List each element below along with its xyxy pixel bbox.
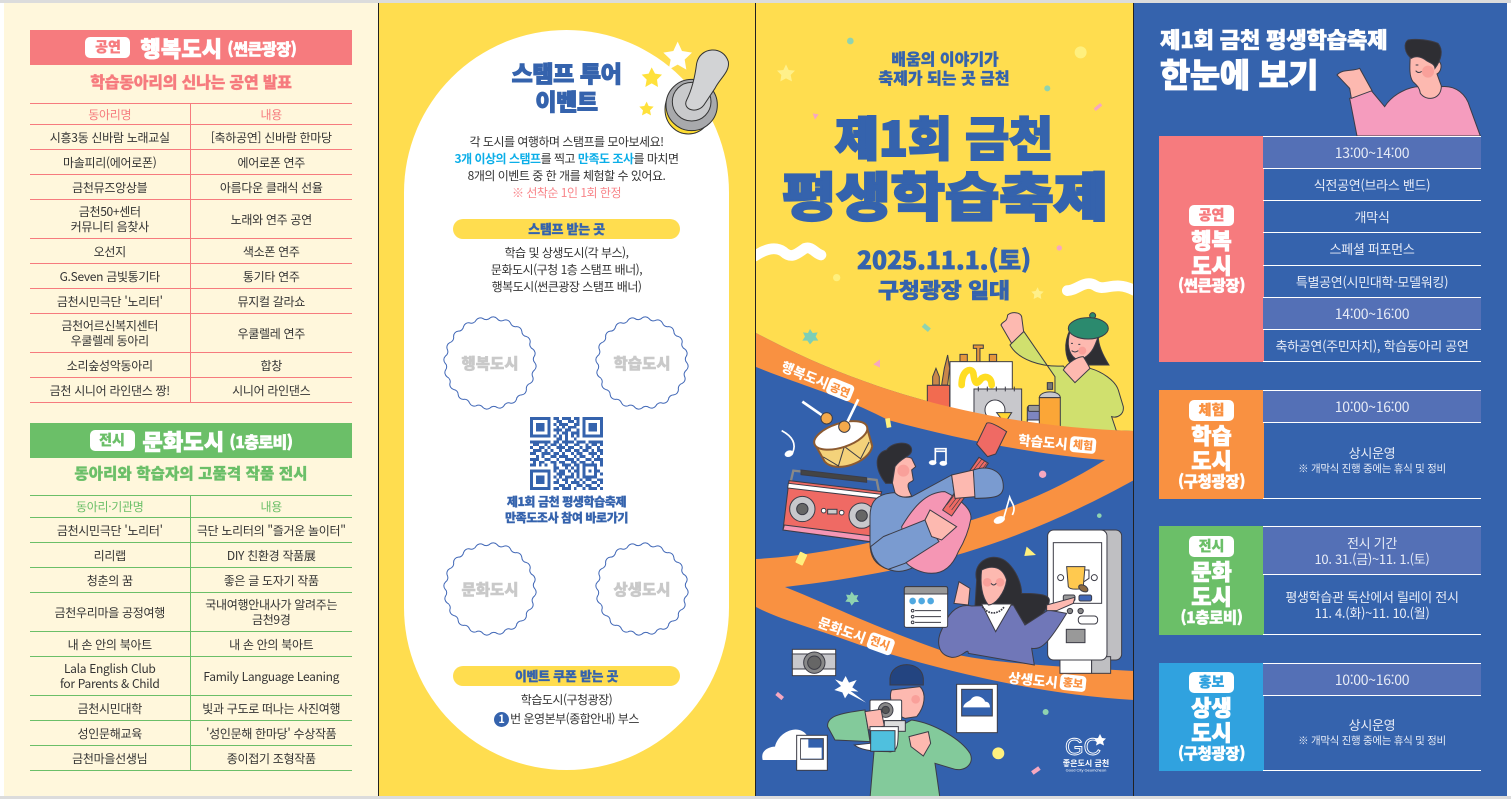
heading: 문화도시 bar: 문화도시 <box>143 424 224 456</box>
stamp: 상생도시: 상생도시 <box>613 578 671 600</box>
icon: boombox <box>783 470 882 542</box>
ribbon label: 문화도시 전시: 전시 <box>868 632 892 654</box>
row: 스페셜 퍼포먼스 <box>1263 232 1481 265</box>
text: coupon location: 1 <box>498 711 505 727</box>
icon: survey window <box>845 587 948 627</box>
icon: music notes <box>782 431 1014 525</box>
text: coupon location: 학습도시(구청광장) <box>521 691 612 708</box>
illustration: presenter <box>1336 38 1481 136</box>
time: 학습도시 10:00~16:00: 10:00~16:00 <box>1335 396 1409 416</box>
pill: 스탬프 받는 곳 <box>453 219 680 239</box>
text: coupon location <box>494 691 639 727</box>
table: 전시 동아리: 금천마을선생님 <box>72 750 147 766</box>
table: 전시 동아리 <box>30 495 352 771</box>
logo: 좋은도시 금천: Good City Geumcheon <box>1066 768 1106 772</box>
decoration: middle confetti <box>795 323 1102 566</box>
decoration: top confetti <box>755 38 1135 299</box>
row: 상시운영 상생: ※ 개막식 진행 중에는 휴식 및 정비 <box>1298 733 1446 748</box>
block: 문화도시: 도시 <box>1191 580 1232 612</box>
stamp: 학습도시 <box>596 317 688 409</box>
row: 릴레이 전시: 평생학습관 독산에서 릴레이 전시 <box>1285 586 1459 606</box>
block: 행복도시: 행복 <box>1191 224 1232 256</box>
QR code <box>530 417 603 490</box>
table: 공연 동아리: 색소폰 연주 <box>243 242 300 260</box>
heading: stamp tour <box>512 55 621 117</box>
block: 문화도시: 전시 <box>1199 536 1224 556</box>
table: 전시 동아리: 금천우리마을 공정여행 <box>55 604 165 620</box>
block: 상생도시 <box>1159 663 1264 771</box>
row: 축하공연 <box>1263 329 1481 361</box>
ribbon label: 상생도시 홍보: 홍보 <box>1062 674 1084 692</box>
logo: 좋은도시 금천: GC <box>1065 734 1101 761</box>
table: 공연 동아리: 금천시민극단 '노리터' <box>57 292 163 310</box>
table: 공연 동아리: 시흥3동 신바람 노래교실 <box>50 128 170 146</box>
ribbon label: 상생도시 홍보 <box>1007 666 1087 692</box>
row: 개막식: 개막식 <box>1354 206 1389 226</box>
table: 공연 동아리: 우쿨렐레 연주 <box>237 324 305 342</box>
subheading: 공연 발표: 학습동아리의 신나는 공연 발표 <box>90 69 292 93</box>
table: 공연 동아리: 통기타 연주 <box>243 268 300 284</box>
text: stamp locations <box>491 244 642 295</box>
illustration: photographer <box>828 665 971 798</box>
table: 공연 동아리: 커뮤니티 음찾사 <box>71 218 149 235</box>
table: 전시 동아리: 금천시민대학 <box>78 700 142 716</box>
table: 공연 동아리: 금천 시니어 라인댄스 짱! <box>50 382 170 398</box>
panel: cover poster <box>756 3 1133 796</box>
table: 전시 동아리: 국내여행안내사가 알려주는 <box>205 596 337 613</box>
illustration: kiosk <box>1048 530 1122 673</box>
table: 공연 동아리: 내용 <box>260 106 282 122</box>
heading: 문화도시 bar: (1층로비) <box>229 428 292 452</box>
row: 상시운영 상생 <box>1263 695 1481 771</box>
table: 공연 동아리: 우쿨렐레 동아리 <box>71 332 149 349</box>
table: 전시 동아리: 금천9경 <box>252 611 291 628</box>
stamp: 행복도시: 행복도시 <box>461 352 519 374</box>
row: 상시운영: 상시운영 <box>1349 442 1395 462</box>
table: 전시 동아리: 동아리·기관명 <box>76 498 144 515</box>
time: 14:00~16:00: 14:00~16:00 <box>1335 304 1409 324</box>
logo: 좋은도시 금천 <box>1063 734 1109 772</box>
panel: programme tables <box>4 3 379 796</box>
block: 상생도시: 홍보 <box>1199 672 1224 692</box>
block: 상생도시: 도시 <box>1191 716 1232 748</box>
row: 식전공연 <box>1263 168 1481 200</box>
block: 학습도시: 체험 <box>1199 400 1224 420</box>
text: stamp locations: 학습 및 상생도시(각 부스), <box>505 244 628 261</box>
table: 전시 동아리: Family Language Leaning <box>203 668 339 684</box>
time: 14:00~16:00 <box>1263 297 1481 329</box>
ribbon label: 학습도시 체험: 학습도시 <box>1017 429 1069 453</box>
title: schedule line 2: 한눈에 보기 <box>1160 49 1318 97</box>
row: 스페셜 퍼포먼스: 스페셜 퍼포먼스 <box>1330 239 1414 258</box>
row: 릴레이 전시: 11. 4.(화)~11. 10.(월) <box>1314 602 1430 622</box>
row: 식전공연: 식전공연(브라스 밴드) <box>1314 174 1430 194</box>
table: 전시 동아리: '성인문해 한마당' 수상작품 <box>206 724 336 742</box>
block: 행복도시: (썬큰광장) <box>1178 274 1245 296</box>
text: slogan: 배움의 이야기가 <box>891 46 999 70</box>
row: 상시운영: ※ 개막식 진행 중에는 휴식 및 정비 <box>1298 460 1446 476</box>
block: 학습도시 <box>1159 390 1264 499</box>
row: 특별공연 <box>1263 265 1481 297</box>
table: 공연 동아리: 금천어르신복지센터 <box>61 317 158 334</box>
table: 공연 동아리: G.Seven 금빛통기타 <box>60 268 160 284</box>
stamp slots <box>443 316 689 636</box>
block: 행복도시 <box>1159 136 1264 362</box>
text: stamp tour description: 8개의 이벤트 중 한 개를 체험할 수 있어요. <box>468 166 665 184</box>
table: 공연 동아리: 동아리명 <box>88 106 131 122</box>
icon: stamp lever and stars <box>639 42 729 134</box>
text: stamp locations: 행복도시(썬큰광장 스탬프 배너) <box>492 278 641 295</box>
schedule rows: 행복도시 <box>1263 136 1481 362</box>
text: date: 2025.11.1.(토) <box>857 241 1031 276</box>
text: stamp tour description <box>454 132 679 200</box>
block: 학습도시: 학습 <box>1191 419 1232 451</box>
table: 전시 동아리: DIY 친환경 작품展 <box>227 546 316 564</box>
time: 전시 기간: 전시 기간 <box>1347 532 1397 552</box>
panel: stamp tour background <box>379 3 756 796</box>
heading: 행복도시 bar: (썬큰광장) <box>227 36 297 60</box>
table: 전시 동아리: 빛과 구도로 떠나는 사진여행 <box>202 700 340 716</box>
time: 전시 기간: 10. 31.(금)~11. 1.(토) <box>1314 548 1430 568</box>
icon: drum <box>802 399 877 474</box>
table: 전시 동아리: 극단 노리터의 "즐거운 놀이터" <box>197 522 346 538</box>
table: 공연 동아리: 오선지 <box>94 242 126 260</box>
illustration: thumbs-up woman <box>939 557 1075 665</box>
text: stamp locations: 문화도시(구청 1층 스탬프 배너), <box>491 261 642 278</box>
stamp: 상생도시 <box>596 543 688 635</box>
table: 전시 동아리: 성인문해교육 <box>78 724 142 742</box>
heading: 문화도시 bar <box>30 423 352 458</box>
table: 공연 동아리: 뮤지컬 갈라쇼 <box>237 292 305 310</box>
orange ribbon road <box>756 333 1134 700</box>
illustration: camera, clouds and photos <box>762 649 1049 775</box>
table: 전시 동아리: 종이접기 조형작품 <box>227 750 316 766</box>
stamp: 행복도시 <box>444 317 536 409</box>
pill: 이벤트 쿠폰 받는 곳 <box>453 666 680 686</box>
ribbon label: 행복도시 공연: 행복도시 <box>779 355 832 393</box>
time: 13:00~14:00 <box>1263 136 1481 168</box>
row: 개막식 <box>1263 200 1481 232</box>
panel: stamp tour white arch <box>404 30 729 770</box>
ribbon label: 학습도시 체험 <box>1017 429 1097 454</box>
ribbon label: 문화도시 전시 <box>816 611 896 656</box>
table: 전시 동아리: 내 손 안의 북아트 <box>68 636 152 652</box>
table: 전시 동아리: 금천시민극단 '노리터' <box>57 522 163 538</box>
table: 공연 동아리: 아름다운 클래식 선율 <box>220 178 323 196</box>
heading: 행복도시 bar: 공연 <box>95 37 121 57</box>
table: 공연 동아리: 금천뮤즈앙상블 <box>72 178 147 196</box>
table: 공연 동아리 <box>30 103 352 403</box>
time: 상생도시 10:00~16:00 <box>1263 663 1481 695</box>
bottom page rule <box>0 796 1511 799</box>
table: 공연 동아리: 마솔피리(에어로폰) <box>63 154 156 170</box>
title: schedule line 1: 제1회 금천 평생학습축제 <box>1160 23 1387 55</box>
text: QR caption: 제1회 금천 평생학습축제 <box>507 493 626 510</box>
ribbon label: 학습도시 체험: 체험 <box>1072 436 1094 454</box>
ribbon label: 행복도시 공연 <box>779 355 855 402</box>
top page rule <box>0 0 1511 3</box>
heading: stamp tour: 이벤트 <box>535 83 598 117</box>
heading: 행복도시 bar <box>30 30 352 65</box>
table: 전시 동아리: Lala English Club <box>64 660 156 677</box>
time: 상생도시 10:00~16:00: 10:00~16:00 <box>1335 670 1409 690</box>
text: stamp tour description: 각 도시를 여행하며 스탬프를 모아보세요! <box>470 132 664 150</box>
text: QR caption <box>505 493 628 526</box>
time: 학습도시 10:00~16:00 <box>1263 390 1481 422</box>
table: 공연 동아리: 합창 <box>260 356 282 374</box>
block: 상생도시: 상생 <box>1191 691 1232 723</box>
pill: 스탬프 받는 곳: 스탬프 받는 곳 <box>528 219 605 238</box>
text: stamp tour description: ※ 선착순 1인 1회 한정 <box>512 184 621 200</box>
pill: 이벤트 쿠폰 받는 곳: 이벤트 쿠폰 받는 곳 <box>515 666 618 685</box>
title: line 2: 평생학습축제 <box>782 156 1108 231</box>
time: 13:00~14:00: 13:00~14:00 <box>1335 142 1409 162</box>
text: coupon location: 번 운영본부(종합안내) 부스 <box>510 710 639 727</box>
table: 전시 동아리: 내용 <box>260 498 282 515</box>
table: 전시 동아리: 청춘의 꿈 <box>87 572 133 588</box>
table: 전시 동아리: 좋은 글 도자기 작품 <box>224 572 319 588</box>
row: 릴레이 전시 <box>1263 574 1481 635</box>
block: 문화도시 <box>1159 526 1264 635</box>
illustration: guitarist <box>870 423 1007 573</box>
ribbon label: 행복도시 공연: 공연 <box>828 379 852 401</box>
block: 학습도시: 도시 <box>1191 444 1232 476</box>
block: 상생도시: (구청광장) <box>1178 742 1245 764</box>
title: line 1: 제1회 금천 <box>835 101 1053 170</box>
table: 전시 동아리: for Parents & Child <box>60 675 160 692</box>
table: 전시 동아리: 내 손 안의 북아트 <box>229 636 313 652</box>
table: 공연 동아리: 금천50+센터 <box>79 203 141 220</box>
logo: 좋은도시 금천: 좋은도시 금천 <box>1063 758 1109 769</box>
subheading: 작품 전시: 동아리와 학습자의 고품격 작품 전시 <box>74 462 308 484</box>
heading: 행복도시 bar: 행복도시 <box>140 32 222 64</box>
stamp: 문화도시 <box>444 543 536 635</box>
block: 학습도시: (구청광장) <box>1178 470 1245 492</box>
ribbon label: 문화도시 전시: 문화도시 <box>816 611 869 647</box>
table: 공연 동아리: 에어로폰 연주 <box>237 154 305 170</box>
block: 문화도시: 문화 <box>1191 555 1232 587</box>
row: 특별공연: 특별공연(시민대학-모델워킹) <box>1296 272 1448 290</box>
text: venue: 구청광장 일대 <box>878 275 1010 305</box>
panel: schedule background <box>1133 3 1507 796</box>
table: 공연 동아리: 소리숲성악동아리 <box>67 356 153 374</box>
row: 축하공연: 축하공연(주민자치), 학습동아리 공연 <box>1275 336 1469 354</box>
table: 공연 동아리: 노래와 연주 공연 <box>231 210 312 228</box>
heading: 문화도시 bar: 전시 <box>99 430 125 450</box>
text: slogan line 2: 축제가 되는 곳 금천 <box>878 65 1010 89</box>
time: 전시 기간 <box>1263 526 1481 574</box>
row: 상시운영 <box>1263 422 1481 499</box>
stamp: 문화도시: 문화도시 <box>461 578 519 600</box>
heading: stamp tour: 스탬프 투어 <box>512 55 621 89</box>
table: 공연 동아리: 시니어 라인댄스 <box>232 382 310 398</box>
table: 공연 동아리: [축하공연] 신바람 한마당 <box>211 128 332 146</box>
row: 상시운영 상생: 상시운영 <box>1349 715 1395 734</box>
text: stamp tour description: 3개 이상의 스탬프를 찍고 만족도 조사를 마치면 <box>454 150 679 166</box>
block: 행복도시: 공연 <box>1199 205 1224 225</box>
block: 문화도시: (1층로비) <box>1180 606 1243 628</box>
text: QR caption: 만족도조사 참여 바로가기 <box>505 509 628 526</box>
illustration: painter and art supplies <box>927 313 1123 438</box>
stamp: 학습도시: 학습도시 <box>613 352 671 374</box>
table: 전시 동아리: 리리랩 <box>94 546 126 564</box>
ribbon label: 상생도시 홍보: 상생도시 <box>1007 666 1059 692</box>
block: 행복도시: 도시 <box>1191 249 1232 281</box>
